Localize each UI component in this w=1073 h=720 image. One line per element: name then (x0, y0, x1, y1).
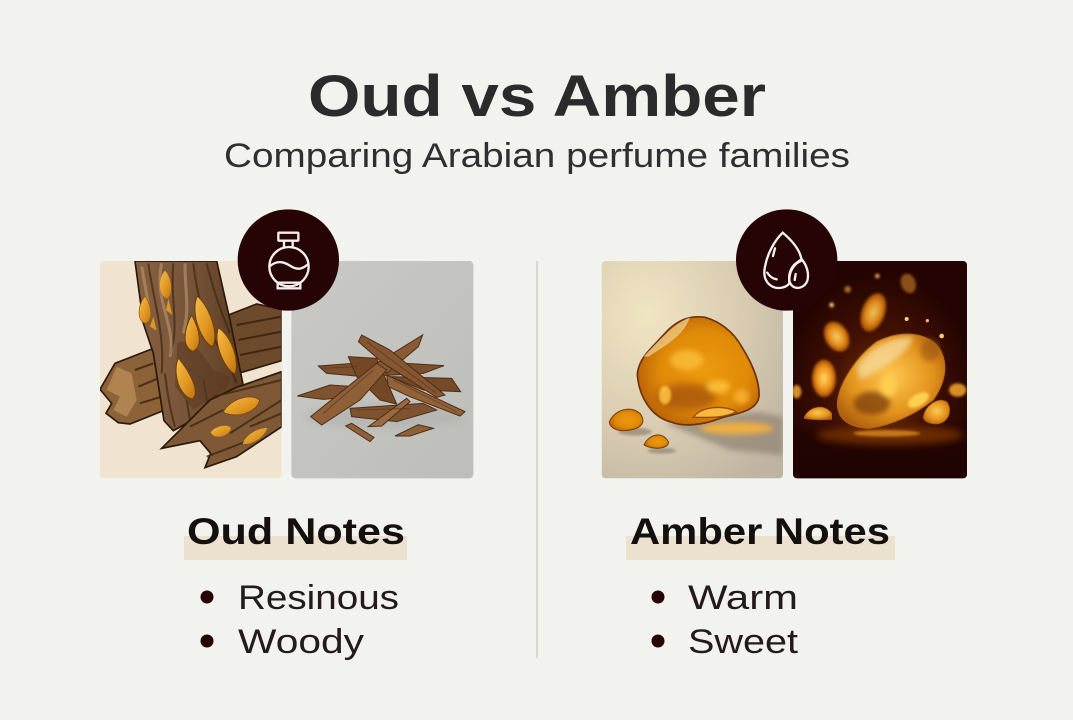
image: glowing amber (792, 261, 967, 478)
list: oud notes: Resinous (238, 579, 399, 617)
list: oud notes (200, 579, 399, 661)
panel: oud images (100, 209, 473, 478)
list: amber notes: Warm (688, 579, 798, 617)
heading: Amber Notes: Amber Notes (630, 511, 890, 552)
infographic (100, 74, 967, 660)
panel: amber images (602, 209, 967, 478)
image: oud wood with resin (100, 261, 282, 478)
list: oud notes: Woody (238, 623, 364, 661)
list: amber notes: Sweet (688, 623, 799, 661)
image: amber stones (602, 261, 783, 478)
subtitle: Comparing Arabian perfume families (224, 137, 850, 175)
list: amber notes (652, 579, 799, 661)
image: oud wood chips (291, 261, 473, 478)
icon: perfume bottle badge (238, 209, 339, 311)
icon: droplets badge (736, 209, 837, 311)
title: Oud vs Amber (308, 64, 766, 129)
heading: Oud Notes: Oud Notes (187, 511, 405, 552)
column divider (536, 261, 538, 658)
